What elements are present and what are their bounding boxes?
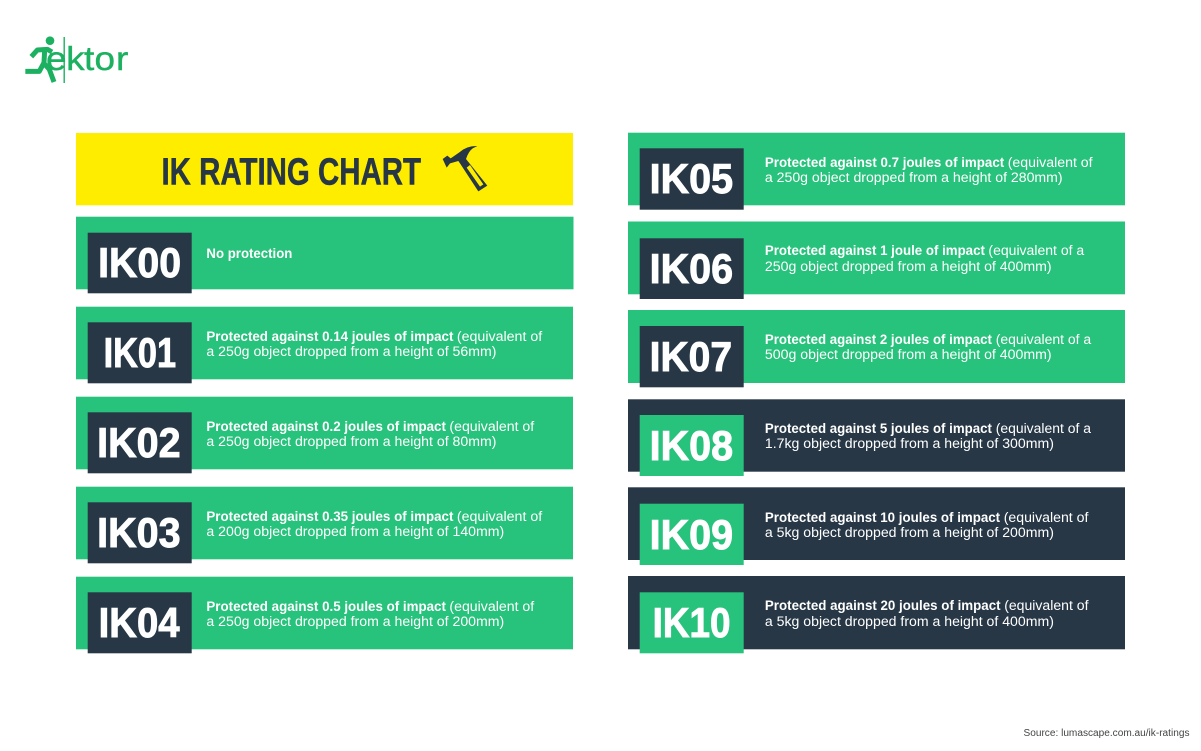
description: 1.7kg object dropped from a height of 300mm) [765, 436, 1054, 451]
badge: IK01 [88, 322, 192, 383]
description: a 250g object dropped from a height of 280mm) [765, 170, 1063, 185]
panel: chart title [76, 133, 573, 205]
description [206, 509, 542, 539]
description [765, 598, 1089, 629]
badge: IK06: IK06 [650, 245, 733, 292]
badge: IK09 [640, 504, 744, 565]
badge: IK00 [88, 233, 192, 293]
badge: IK03 [88, 502, 192, 563]
description: Protected against 0.2 joules of impact [206, 419, 446, 434]
logo divider [64, 37, 65, 83]
badge: IK05 [640, 148, 744, 210]
badge: IK02 [88, 412, 192, 473]
panel: IK01 [76, 307, 573, 383]
description: a 200g object dropped from a height of 140mm) [206, 524, 504, 539]
description [206, 599, 534, 629]
description: (equivalent of [449, 419, 534, 434]
description: (equivalent of a [988, 243, 1085, 258]
description: Protected against 0.14 joules of impact [206, 329, 454, 344]
description: 500g object dropped from a height of 400mm) [765, 347, 1052, 362]
badge: IK04 [88, 592, 192, 653]
description: a 250g object dropped from a height of 56mm) [206, 344, 496, 359]
description: Protected against 2 joules of impact [765, 332, 992, 347]
description [765, 332, 1092, 362]
badge: IK07: IK07 [650, 333, 732, 380]
description: Protected against 20 joules of impact [765, 598, 1001, 613]
source note: Source: lumascape.com.au/ik-ratings [1024, 728, 1190, 739]
description: Protected against 0.35 joules of impact [206, 509, 454, 524]
badge: IK06 [640, 238, 744, 299]
description: a 250g object dropped from a height of 200mm) [206, 614, 504, 629]
badge: IK00: IK00 [98, 239, 181, 286]
badge: IK09: IK09 [650, 511, 733, 558]
description: (equivalent of [457, 509, 542, 524]
description: Protected against 5 joules of impact [765, 421, 992, 436]
panel: IK07 [628, 310, 1125, 387]
badge: IK07 [640, 326, 744, 387]
badge: IK01: IK01 [104, 329, 176, 376]
description [206, 419, 534, 449]
logo: ektor running man [25, 36, 129, 83]
panel: IK06 [628, 222, 1125, 299]
description: Protected against 0.7 joules of impact [765, 155, 1005, 170]
description [765, 510, 1089, 540]
panel: IK08 [628, 399, 1125, 476]
panel: IK04 [76, 577, 573, 653]
badge: IK10 [640, 592, 744, 653]
description: (equivalent of [1004, 510, 1089, 525]
description [206, 329, 542, 359]
badge: IK08 [640, 415, 744, 476]
description: (equivalent of a [996, 421, 1092, 436]
description: a 250g object dropped from a height of 80mm) [206, 434, 496, 449]
panel: IK05 [628, 133, 1125, 210]
description: (equivalent of [457, 329, 542, 344]
description: Protected against 0.5 joules of impact [206, 599, 446, 614]
heading: IK RATING CHART [162, 151, 421, 193]
description: No protection [206, 246, 292, 261]
description [765, 243, 1085, 274]
description: (equivalent of [1004, 598, 1089, 613]
description: (equivalent of [1008, 155, 1093, 170]
description [765, 421, 1092, 451]
description: (equivalent of [449, 599, 534, 614]
badge: IK05: IK05 [650, 155, 733, 202]
badge: IK03: IK03 [97, 509, 181, 556]
badge: IK08: IK08 [650, 422, 733, 469]
description: Protected against 10 joules of impact [765, 510, 1001, 525]
description [765, 155, 1093, 185]
panel: IK03 [76, 487, 573, 563]
badge: IK04: IK04 [99, 599, 180, 646]
description: Protected against 1 joule of impact [765, 243, 985, 258]
logo wordmark: ektor [46, 41, 129, 78]
icon: hammer [443, 146, 487, 191]
description: (equivalent of a [996, 332, 1092, 347]
panel: IK00 [76, 217, 574, 293]
panel: IK10 [628, 576, 1125, 653]
panel: IK09 [628, 487, 1125, 565]
icon: running figure [25, 36, 54, 82]
panel: IK02 [76, 397, 573, 473]
description: 250g object dropped from a height of 400mm) [765, 259, 1052, 274]
description: a 5kg object dropped from a height of 200mm) [765, 525, 1054, 540]
badge: IK02: IK02 [97, 419, 181, 466]
badge: IK10: IK10 [653, 599, 731, 646]
description: a 5kg object dropped from a height of 400mm) [765, 614, 1054, 629]
